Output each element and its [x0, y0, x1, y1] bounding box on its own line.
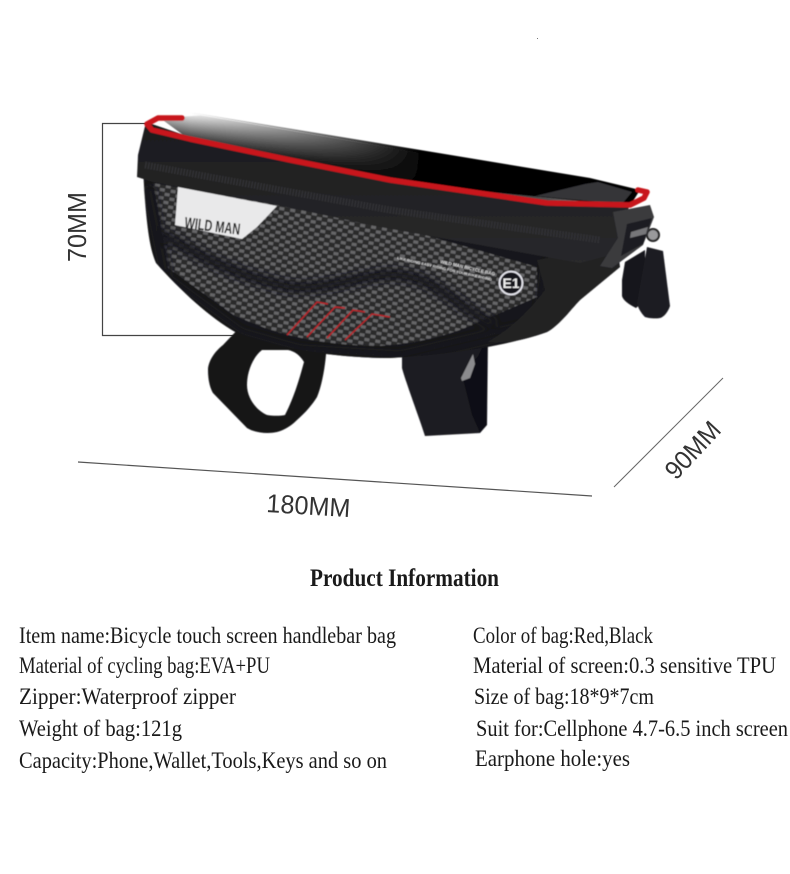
brand name: WILD MAN — [184, 215, 241, 239]
zipper pull, rear tab — [622, 250, 645, 308]
label: 70MM: 70MM — [62, 192, 92, 262]
red chevron stripes — [287, 302, 390, 340]
screen right corner flap — [535, 182, 632, 204]
specification list: right column: Color of bag:Red,Black — [473, 623, 653, 648]
heading: Product Information: Product Information — [310, 565, 499, 592]
specification list: left column: Material of cycling bag:EVA+PU — [19, 653, 270, 678]
black zip band — [137, 122, 630, 263]
stitching on band — [145, 165, 600, 240]
tiny marks at top — [537, 38, 538, 39]
zipper pull metal knob — [647, 229, 659, 241]
dimension line: 180MM width — [78, 462, 592, 523]
specification list: left column: Weight of bag:121g — [19, 716, 182, 741]
dimension bracket: 70MM height — [62, 124, 240, 336]
brand label — [175, 187, 277, 239]
carbon fibre panel — [153, 183, 537, 346]
specification list: right column: Earphone hole:yes — [475, 746, 630, 771]
product caption: LIKE RIDING EASY RIDING FOR YOUR BIKE RIDING — [397, 256, 492, 282]
label: 180MM: 180MM — [266, 488, 351, 523]
product photo: handlebar bag — [137, 112, 670, 436]
label: 90MM: 90MM — [658, 415, 727, 485]
bag main body shell — [143, 170, 620, 358]
specification list: left column: Zipper:Waterproof zipper — [19, 684, 236, 709]
zipper end tab — [600, 205, 654, 268]
specification list: right column — [473, 623, 788, 771]
specification list: right column: Size of bag:18*9*7cm — [474, 684, 654, 709]
dimension line: 90MM depth — [614, 378, 727, 487]
screen window — [160, 116, 640, 206]
specification list: left column: Capacity:Phone,Wallet,Tools,Keys and so on — [19, 748, 387, 773]
zipper pull, front tab — [637, 247, 670, 318]
right strap — [402, 335, 488, 436]
product caption: WILD MAN BICYCLE BAG — [440, 259, 496, 277]
E1 badge — [500, 272, 522, 294]
screen fade to black — [190, 112, 640, 206]
specification list: left column — [19, 623, 396, 773]
carbon panel dark waves — [150, 190, 548, 358]
specification list: left column: Item name:Bicycle touch screen handlebar bag — [19, 623, 396, 648]
red piping — [147, 118, 647, 205]
left handlebar strap loop — [208, 325, 327, 433]
E1 badge: E1 — [502, 275, 520, 291]
side fabric panel — [487, 245, 620, 343]
